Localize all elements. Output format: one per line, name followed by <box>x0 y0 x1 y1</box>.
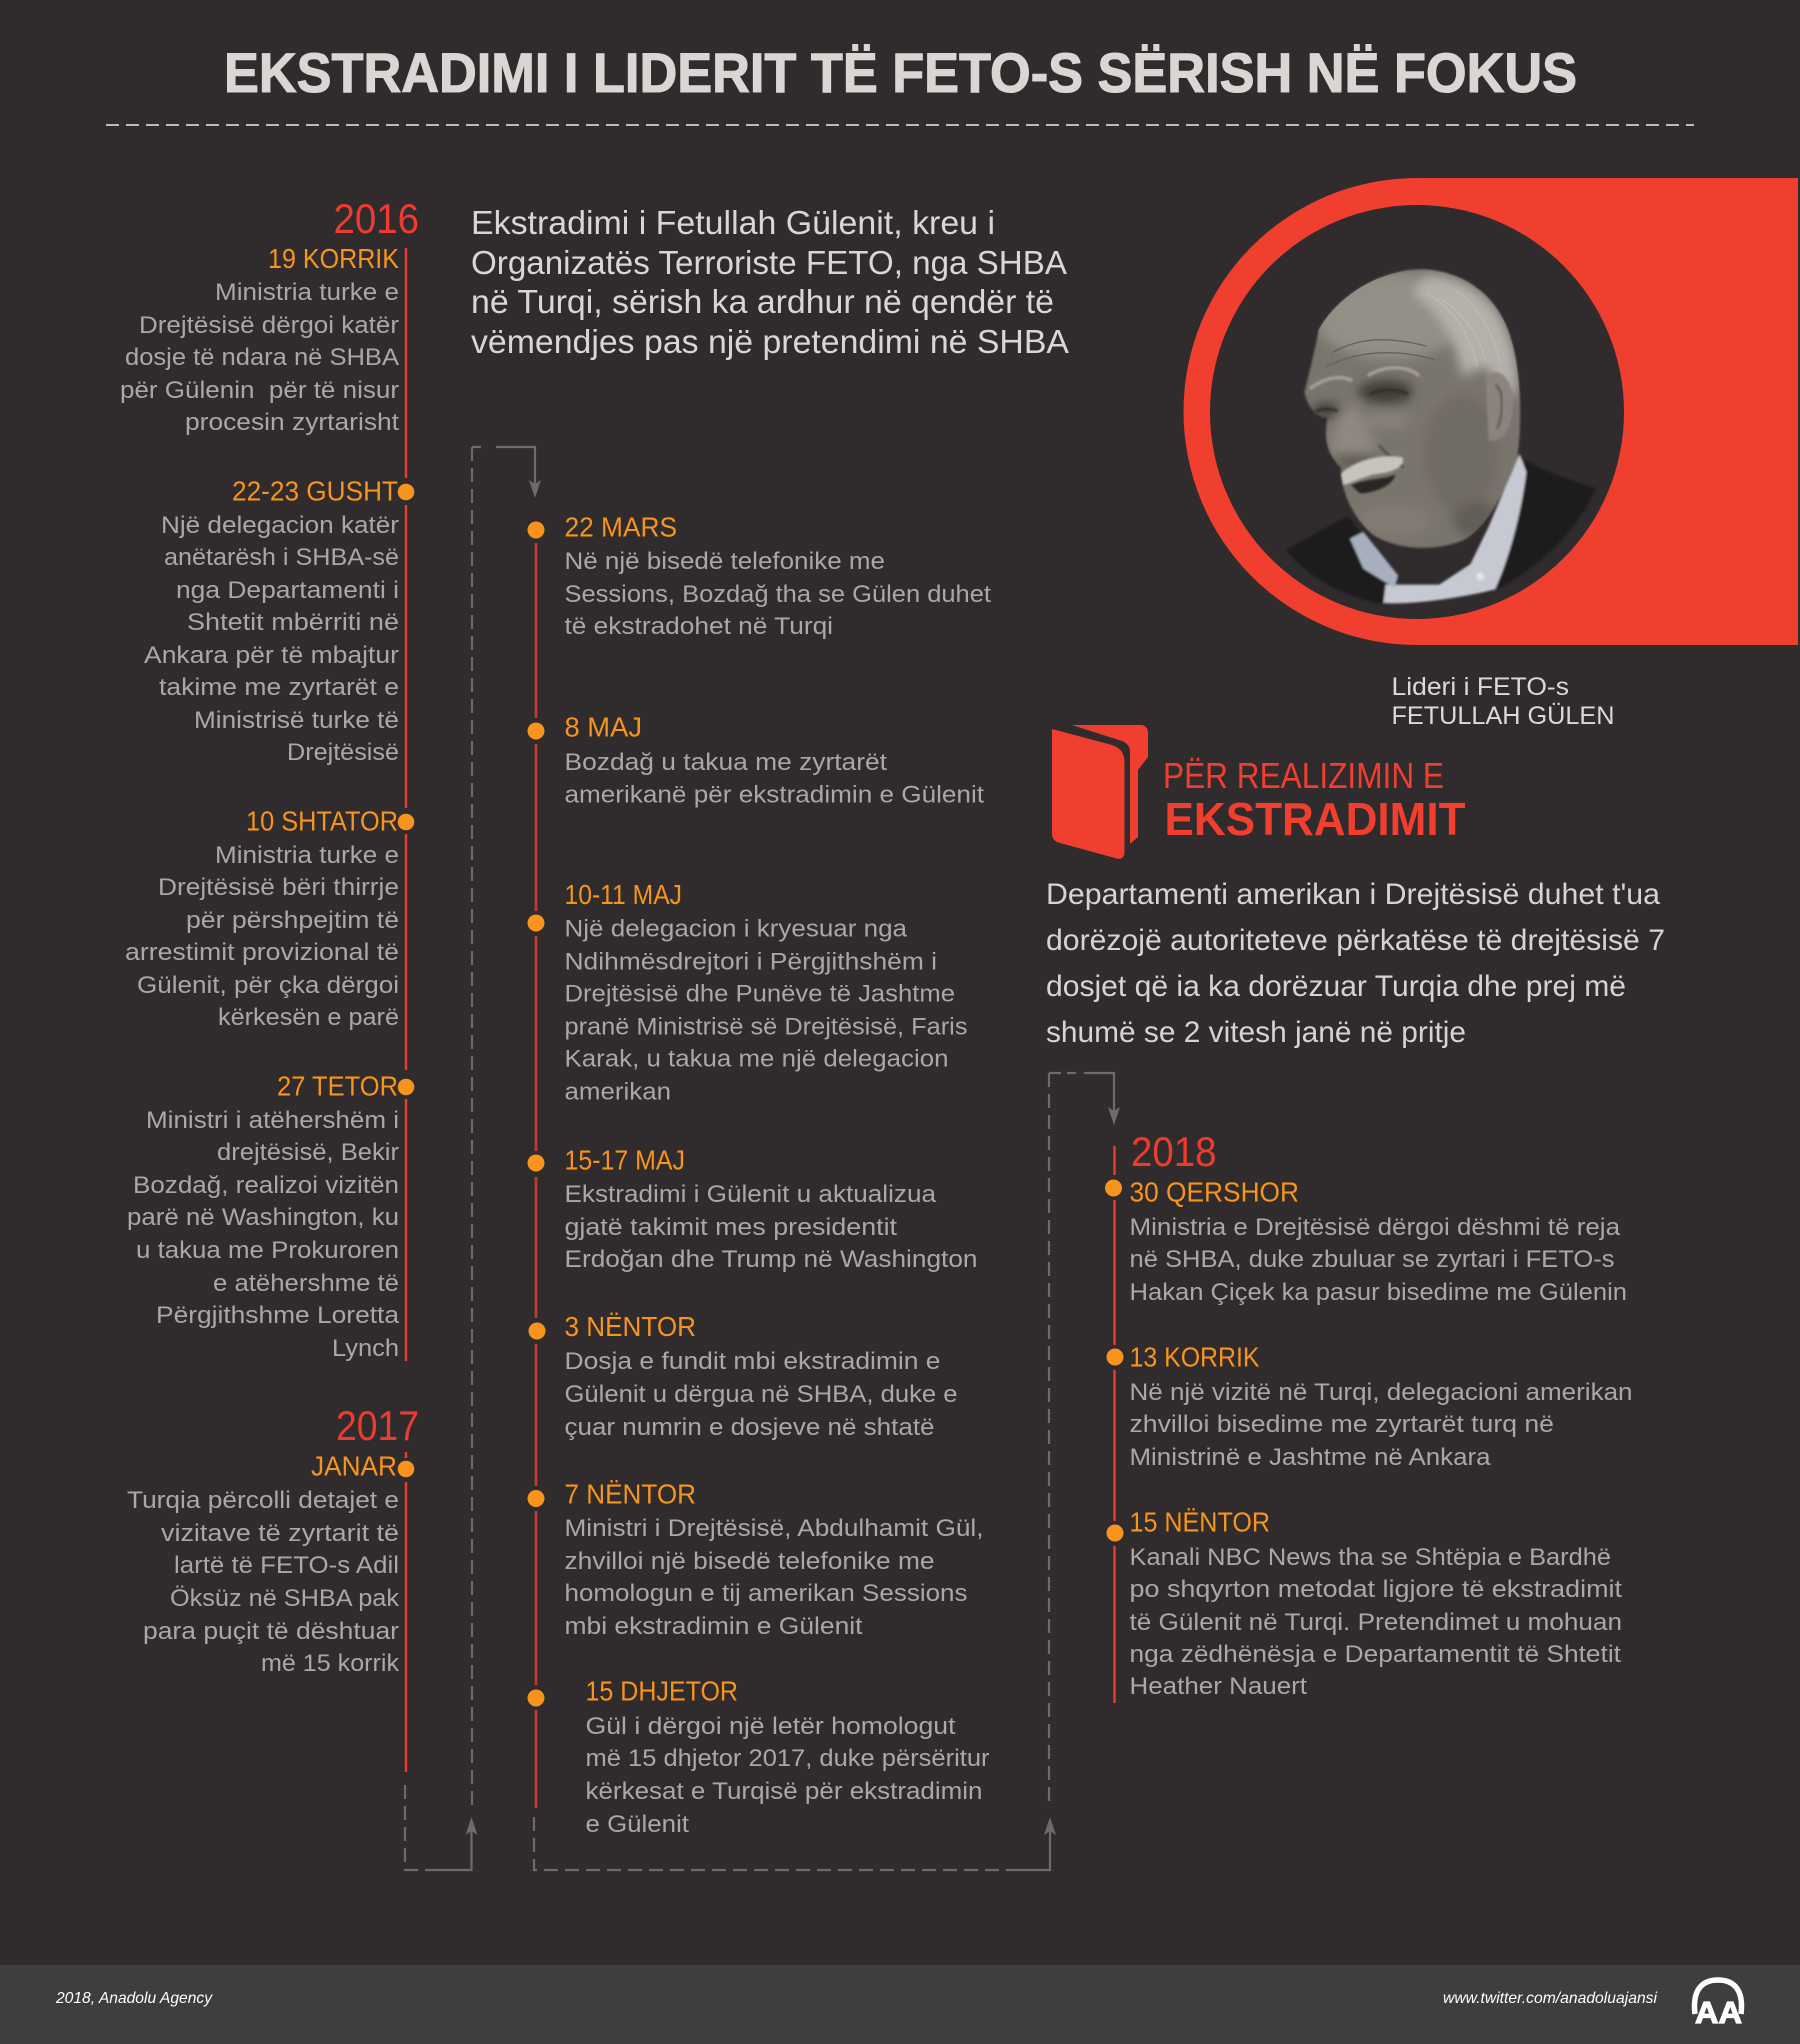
event: 15 nentor: të Gülenit në Turqi. Pretendimet u mohuan <box>1130 1609 1622 1636</box>
event: 15 dhjetor: kërkesat e Turqisë për ekstradimin <box>586 1778 982 1805</box>
intro text: në Turqi, sërish ka ardhur në qendër të <box>471 283 1054 320</box>
event: 10-11 maj: Një delegacion i kryesuar nga <box>564 916 908 942</box>
event: 19 korrik: procesin zyrtarisht <box>185 409 399 436</box>
arrow: middle column to right column <box>534 1073 1120 1870</box>
event: 10-11 maj <box>564 879 968 1106</box>
event: 30 qershor: 30 QERSHOR <box>1130 1176 1299 1208</box>
event: 15 dhjetor: e Gülenit <box>586 1811 689 1838</box>
event: 15-17 maj: 15-17 MAJ <box>564 1144 685 1176</box>
caption <box>1392 673 1614 730</box>
event: 10-11 maj: pranë Ministrisë së Drejtësisë, Faris <box>564 1014 968 1040</box>
event: janar: para puçit të dështuar <box>143 1618 399 1645</box>
event: 22-23 gusht: nga Departamenti i <box>176 577 399 604</box>
event: 15-17 maj: gjatë takimit mes presidentit <box>564 1214 897 1241</box>
event: 19 korrik: dosje të ndara në SHBA <box>125 344 399 371</box>
event: 10-11 maj: Ndihmësdrejtori i Përgjithshëm i <box>564 948 937 976</box>
text block: justice department: Departamenti amerikan i Drejtësisë duhet t'ua <box>1046 878 1661 911</box>
event: 19 korrik: për Gülenin për të nisur <box>120 377 399 404</box>
event: 30 qershor: Ministria e Drejtësisë dërgoi dëshmi të reja <box>1130 1214 1621 1241</box>
event: 27 tetor: u takua me Prokuroren <box>136 1237 399 1264</box>
year 2016: 2016 <box>334 195 419 242</box>
event: 22-23 gusht <box>144 476 399 766</box>
intro text <box>471 204 1069 360</box>
event: 10 shtator: Gülenit, për çka dërgoi <box>137 972 399 999</box>
event: 7 nentor: Ministri i Drejtësisë, Abdulhamit Gül, <box>564 1515 984 1542</box>
intro text: Ekstradimi i Fetullah Gülenit, kreu i <box>471 204 995 241</box>
text block: justice department: dosjet që ia ka dorëzuar Turqia dhe prej më <box>1046 970 1626 1003</box>
event: 10 shtator: kërkesën e parë <box>218 1004 399 1031</box>
event: 7 nentor: mbi ekstradimin e Gülenit <box>564 1613 863 1640</box>
event: 15 nentor <box>1130 1506 1622 1700</box>
event: 27 tetor: Ministri i atëhershëm i <box>146 1107 399 1134</box>
event: 22-23 gusht: takime me zyrtarët e <box>159 674 399 701</box>
event: janar: Öksüz në SHBA pak <box>170 1585 400 1612</box>
event: 22-23 gusht: Ankara për të mbajtur <box>144 642 399 669</box>
event: 13 korrik: Ministrinë e Jashtme në Ankara <box>1130 1444 1491 1471</box>
event: 30 qershor <box>1130 1176 1627 1306</box>
event: 27 tetor: e atëhershme të <box>213 1270 399 1297</box>
event: 3 nentor <box>564 1311 958 1441</box>
event: 15-17 maj <box>564 1144 978 1273</box>
event: 13 korrik: zhvilloi bisedime me zyrtarët turq në <box>1130 1411 1554 1438</box>
title: EKSTRADIMI I LIDERIT TË FETO-S SËRISH NË FOKUS <box>224 41 1577 104</box>
event: 15 nentor: Kanali NBC News tha se Shtëpia e Bardhë <box>1130 1544 1611 1571</box>
year 2018: 2018 <box>1131 1128 1216 1175</box>
event: 10 shtator: arrestimit provizional të <box>125 939 399 966</box>
event: 3 nentor: çuar numrin e dosjeve në shtatë <box>564 1414 934 1441</box>
year 2017: 2017 <box>336 1402 419 1449</box>
event: 27 tetor: parë në Washington, ku <box>127 1204 399 1231</box>
event: janar: Turqia përcolli detajet e <box>127 1487 399 1514</box>
heading: for realizing the extradition: PËR REALIZIMIN E <box>1163 755 1444 796</box>
event: 10 shtator: Ministria turke e <box>215 842 399 869</box>
red shape with circle <box>1184 178 1798 645</box>
arrow: left column to middle column <box>405 447 541 1870</box>
event: 15 nentor: 15 NËNTOR <box>1130 1506 1270 1538</box>
event: 15 nentor: nga zëdhënësja e Departamentit të Shtetit <box>1130 1641 1621 1668</box>
event: janar: më 15 korrik <box>261 1650 400 1677</box>
panel: timeline 2018 <box>1105 1128 1632 1703</box>
event: 27 tetor: Bozdağ, realizoi vizitën <box>133 1172 399 1199</box>
text block: justice department: dorëzojë autoriteteve përkatëse të drejtësisë 7 <box>1046 924 1665 957</box>
event: 7 nentor: zhvilloi një bisedë telefonike me <box>564 1548 934 1575</box>
event: janar: vizitave të zyrtarit të <box>161 1520 399 1547</box>
event: 10-11 maj: amerikan <box>564 1078 671 1106</box>
event: 10 shtator: për përshpejtim të <box>186 907 399 934</box>
event: 15-17 maj: Erdoğan dhe Trump në Washington <box>564 1246 978 1273</box>
event: 27 tetor <box>127 1070 400 1362</box>
event: 10-11 maj: Drejtësisë dhe Punëve të Jashtme <box>564 980 955 1008</box>
panel: middle timeline <box>528 512 991 1838</box>
event: 7 nentor: 7 NËNTOR <box>564 1478 696 1510</box>
event: 13 korrik: Në një vizitë në Turqi, delegacioni amerikan <box>1130 1379 1632 1406</box>
credit: 2018, Anadolu Agency <box>55 1990 213 2007</box>
event: 22 mars: 22 MARS <box>564 512 677 542</box>
event: 13 korrik: 13 KORRIK <box>1130 1342 1260 1372</box>
event: 22-23 gusht: Ministrisë turke të <box>194 707 399 734</box>
event: janar: JANAR <box>311 1450 397 1482</box>
event: 27 tetor: drejtësisë, Bekir <box>217 1139 399 1166</box>
event: 27 tetor: Lynch <box>332 1335 399 1362</box>
event: 22 mars <box>564 512 991 640</box>
event: 15-17 maj: Ekstradimi i Gülenit u aktualizua <box>564 1181 937 1208</box>
event: 15 dhjetor: Gül i dërgoi një letër homologut <box>586 1713 956 1740</box>
heading: for realizing the extradition <box>1163 755 1466 845</box>
event: 7 nentor <box>564 1478 984 1640</box>
footer <box>0 1965 1800 2044</box>
heading: for realizing the extradition: EKSTRADIMIT <box>1164 793 1466 845</box>
caption: Lideri i FETO-s <box>1392 673 1569 701</box>
event: 27 tetor: 27 TETOR <box>277 1070 398 1102</box>
event: 19 korrik: Drejtësisë dërgoi katër <box>139 312 399 339</box>
event: 22 mars: Në një bisedë telefonike me <box>564 548 885 575</box>
event: 22 mars: Sessions, Bozdağ tha se Gülen duhet <box>564 581 991 608</box>
event: 10 shtator: 10 SHTATOR <box>246 806 398 836</box>
event: 30 qershor: Hakan Çiçek ka pasur bisedime me Gülenin <box>1130 1279 1627 1306</box>
event: 22-23 gusht: 22-23 GUSHT <box>232 476 398 506</box>
event: 13 korrik <box>1130 1342 1632 1471</box>
event: 8 maj: 8 MAJ <box>564 712 642 742</box>
event: janar: lartë të FETO-s Adil <box>174 1552 399 1579</box>
timeline line: middle column <box>528 522 546 1808</box>
event: janar <box>127 1450 400 1677</box>
event: 8 maj: amerikanë për ekstradimin e Gülenit <box>564 782 984 808</box>
icon: folder <box>1052 725 1148 859</box>
event: 15 dhjetor: 15 DHJETOR <box>586 1676 738 1706</box>
icon: Anadolu Agency logo <box>1694 1980 1742 2030</box>
timeline line: right column <box>1105 1146 1124 1703</box>
event: 19 korrik <box>120 243 399 436</box>
event: 8 maj: Bozdağ u takua me zyrtarët <box>564 749 887 776</box>
text block: justice department <box>1046 878 1665 1049</box>
event: 15 dhjetor: më 15 dhjetor 2017, duke përsëritur <box>586 1745 990 1772</box>
timeline line: left column <box>398 248 414 1772</box>
icon: Anadolu Agency logo: AA <box>1695 1995 1742 2030</box>
caption: FETULLAH GÜLEN <box>1392 702 1614 730</box>
event: 3 nentor: Dosja e fundit mbi ekstradimin e <box>564 1348 940 1375</box>
event: 22 mars: të ekstradohet në Turqi <box>564 613 833 640</box>
event: 7 nentor: homologun e tij amerikan Sessions <box>564 1580 968 1607</box>
event: 15 nentor: po shqyrton metodat ligjore të ekstradimit <box>1130 1576 1622 1603</box>
event: 19 korrik: 19 KORRIK <box>268 243 399 274</box>
event: 19 korrik: Ministria turke e <box>215 279 399 306</box>
text block: justice department: shumë se 2 vitesh janë në pritje <box>1046 1016 1466 1049</box>
event: 10 shtator: Drejtësisë bëri thirrje <box>158 874 399 901</box>
event: 3 nentor: Gülenit u dërgua në SHBA, duke e <box>564 1381 958 1408</box>
event: 22-23 gusht: Drejtësisë <box>287 739 399 766</box>
intro text: Organizatës Terroriste FETO, nga SHBA <box>471 244 1067 281</box>
event: 3 nentor: 3 NËNTOR <box>564 1311 696 1342</box>
event: 30 qershor: në SHBA, duke zbuluar se zyrtari i FETO-s <box>1130 1246 1614 1273</box>
event: 10-11 maj: 10-11 MAJ <box>564 879 682 910</box>
twitter link text: www.twitter.com/anadoluajansi <box>1443 1990 1657 2007</box>
intro text: vëmendjes pas një pretendimi në SHBA <box>471 323 1069 360</box>
event: 10-11 maj: Karak, u takua me një delegacion <box>564 1046 948 1072</box>
event: 15 dhjetor <box>586 1676 990 1838</box>
event: 22-23 gusht: Një delegacion katër <box>161 512 399 539</box>
event: 27 tetor: Përgjithshme Loretta <box>156 1302 400 1329</box>
panel: timeline 2016-2017 <box>120 195 419 1772</box>
event: 8 maj <box>564 712 984 808</box>
event: 22-23 gusht: anëtarësh i SHBA-së <box>164 544 399 571</box>
event: 10 shtator <box>125 806 399 1031</box>
portrait: Fetullah Gülen <box>1285 269 1596 604</box>
event: 15 nentor: Heather Nauert <box>1130 1673 1307 1700</box>
event: 22-23 gusht: Shtetit mbërriti në <box>187 609 399 636</box>
